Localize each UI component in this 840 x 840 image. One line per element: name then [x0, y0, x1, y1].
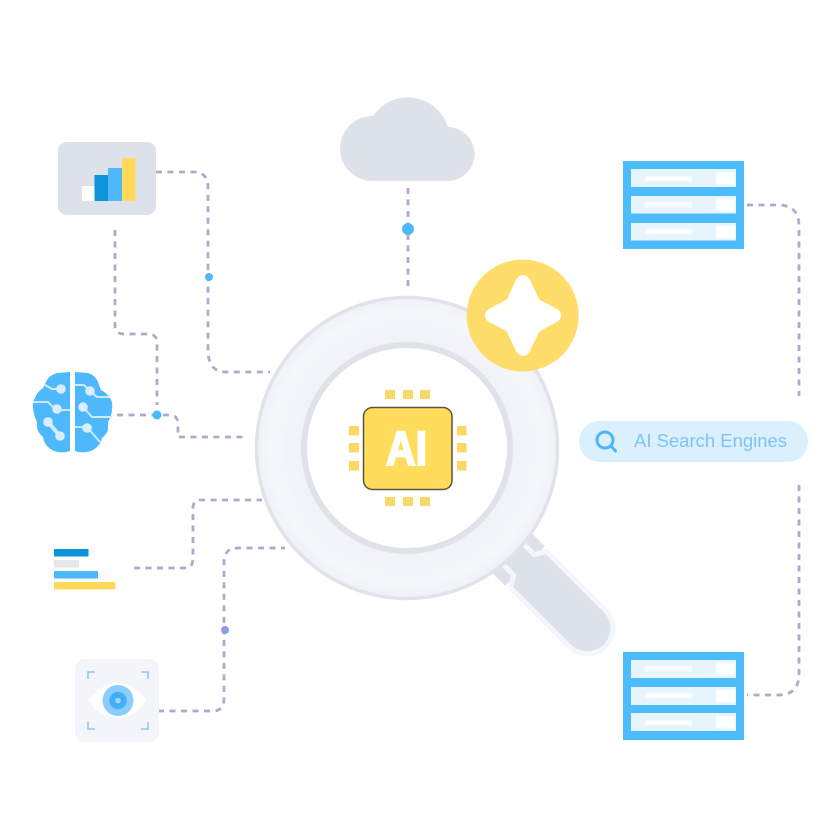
icon: bottom server list	[623, 652, 744, 740]
pill label: AI Search Engines	[634, 431, 787, 451]
handle	[490, 531, 623, 664]
icon: cloud	[340, 97, 474, 181]
lens glass	[304, 345, 510, 551]
icon: top server list	[623, 161, 744, 249]
dashed connectors	[115, 172, 799, 711]
search pill	[579, 421, 808, 462]
connector dots	[152, 223, 414, 634]
magnifying glass	[256, 298, 623, 664]
icon: AI chip: AI	[386, 423, 427, 476]
icon: horizontal bars	[54, 549, 116, 590]
icon: eye card	[75, 659, 159, 742]
icon: sparkle badge	[467, 260, 579, 372]
icon: brain	[33, 372, 112, 452]
icon: chart card	[58, 142, 156, 215]
icon: AI chip	[349, 390, 466, 506]
icon: search	[597, 432, 616, 451]
lens ring	[256, 298, 558, 598]
